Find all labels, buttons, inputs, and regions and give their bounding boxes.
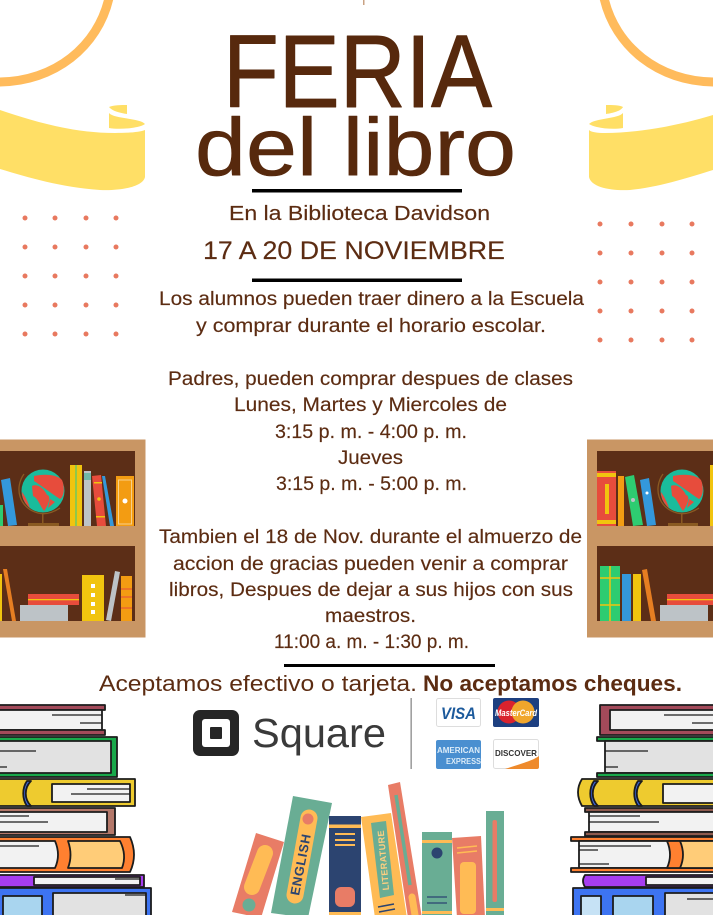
payment notice (99, 671, 682, 696)
book: navy (329, 816, 361, 915)
dots: right (598, 222, 694, 342)
book: thin salmon (388, 782, 422, 915)
book: English: ENGLISH (287, 833, 314, 897)
card: Discover: DISCOVER (495, 748, 537, 758)
text: thanksgiving lunch: Tambien el 18 de Nov. durante el almuerzo de (159, 527, 582, 548)
logo: Square (193, 710, 386, 756)
bookshelf: right (587, 440, 713, 638)
payment notice: Aceptamos efectivo o tarjeta. (99, 671, 417, 696)
dates: 17 A 20 DE NOVIEMBRE (203, 237, 505, 265)
card: Visa: VISA (441, 704, 476, 723)
text: parents schedule: Lunes, Martes y Miercoles de (234, 395, 507, 416)
card: MasterCard (493, 698, 539, 727)
text: parents schedule: Padres, pueden comprar despues de clases (168, 369, 573, 390)
text: thanksgiving lunch: libros, Despues de dejar a sus hijos con sus (169, 580, 573, 601)
decorative arc: top right (604, 0, 713, 82)
text: students: Los alumnos pueden traer dinero a la Escuela (159, 289, 584, 310)
book: English (271, 796, 332, 915)
text: parents schedule: 3:15 p. m. - 4:00 p. m. (275, 422, 467, 443)
book: tall green (486, 811, 504, 915)
text: parents schedule: 3:15 p. m. - 5:00 p. m. (276, 474, 467, 495)
book: Literature: LITERATURE (376, 830, 391, 891)
title: FERIA: FERIA (223, 14, 492, 129)
dots: left (22, 216, 118, 336)
text: parents schedule (168, 369, 573, 495)
card: Discover (494, 740, 539, 769)
title: del libro: del libro (195, 102, 516, 193)
book: green (422, 832, 452, 915)
card: American Express: EXPRESS (446, 757, 482, 766)
book stack: left (0, 705, 151, 915)
ribbon: left (0, 105, 145, 190)
card: American Express: AMERICAN (437, 746, 480, 755)
bookshelf: left (0, 440, 146, 638)
text: thanksgiving lunch: maestros. (325, 606, 416, 627)
text: students: y comprar durante el horario escolar. (196, 316, 546, 337)
book: salmon tilted (232, 833, 284, 915)
logo: Square: Square (252, 710, 386, 756)
text: thanksgiving lunch: 11:00 a. m. - 1:30 p. m. (274, 632, 469, 653)
text: thanksgiving lunch (159, 527, 582, 653)
venue: En la Biblioteca Davidson (229, 203, 490, 225)
text: parents schedule: Jueves (338, 448, 403, 469)
book stack: right (571, 705, 713, 915)
card: American Express (436, 740, 482, 769)
book: Literature (361, 813, 407, 915)
card: Visa (436, 698, 480, 726)
book: salmon (452, 836, 485, 915)
ribbon: right (589, 105, 713, 190)
card: MasterCard: MasterCard (495, 708, 537, 718)
books: bottom center (232, 782, 504, 915)
decorative arc: top left (0, 0, 109, 82)
text: thanksgiving lunch: accion de gracias pueden venir a comprar (173, 554, 569, 575)
text: students (159, 289, 584, 337)
payment notice: No aceptamos cheques. (423, 671, 682, 696)
